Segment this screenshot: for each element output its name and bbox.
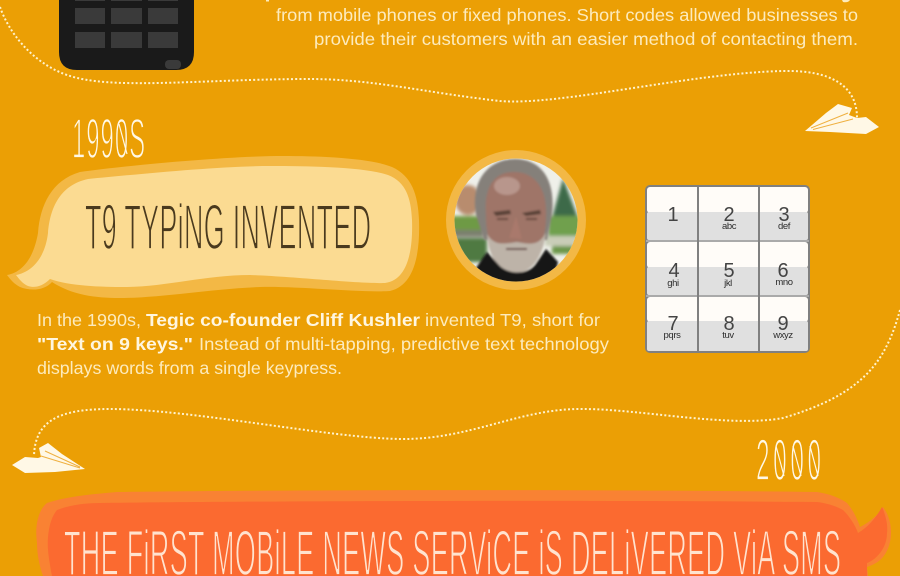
- keypad digits: pqrs: [664, 330, 681, 341]
- dotted flight path: lower: [34, 310, 900, 456]
- keypad digits: 5: [723, 260, 735, 282]
- speech bubble: first mobile news service: [36, 490, 891, 576]
- keypad digits: 8: [723, 313, 735, 335]
- paragraph: T9 description: [37, 310, 609, 378]
- keypad digits: 4: [668, 260, 680, 282]
- year label: 2000: 2000: [756, 429, 821, 493]
- phone illustration: [59, 0, 194, 70]
- intro paragraph about short codes: provide their customers with an easier method of contacting them.: [314, 29, 858, 49]
- keypad digits: jkl: [723, 278, 732, 289]
- keypad digits: 2: [723, 204, 735, 226]
- dotted flight path: upper: [0, 7, 857, 118]
- paragraph: T9 description: "Text on 9 keys.": [37, 334, 193, 354]
- keypad digits: 9: [777, 313, 789, 335]
- year label: 1990s: 1990S: [72, 107, 145, 171]
- keypad digits: def: [778, 221, 791, 232]
- phone keys: [75, 0, 181, 69]
- keypad digits: abc: [722, 221, 737, 232]
- bubble title: T9 TYPiNG INVENTED: [85, 193, 371, 263]
- paragraph: T9 description: invented T9, short for: [425, 310, 600, 330]
- keypad rows: [646, 186, 809, 352]
- intro paragraph about short codes: [266, 0, 858, 49]
- keypad digits: ghi: [667, 278, 679, 289]
- paragraph: T9 description: Instead of multi-tapping, predictive text technology: [199, 334, 609, 354]
- paragraph: T9 description: displays words from a single keypress.: [37, 358, 342, 378]
- intro paragraph about short codes: from mobile phones or fixed phones. Short codes allowed businesses to: [276, 5, 858, 25]
- keypad digits: 3: [778, 204, 790, 226]
- portrait: Cliff Kushler: [446, 150, 586, 290]
- icon: paper plane right: [805, 104, 879, 134]
- keypad digits: 1: [667, 204, 679, 226]
- keypad digits: [664, 204, 793, 341]
- keypad digits: wxyz: [772, 330, 793, 341]
- icon: paper plane left: [12, 443, 85, 473]
- paragraph: T9 description: In the 1990s,: [37, 310, 141, 330]
- keypad digits: 7: [667, 313, 679, 335]
- keypad illustration: [645, 185, 810, 353]
- keypad digits: tuv: [722, 330, 734, 341]
- keypad digits: mno: [775, 277, 793, 288]
- speech bubble: T9 typing invented: [7, 156, 419, 298]
- paragraph: T9 description: Tegic co-founder Cliff Kushler: [146, 310, 420, 330]
- keypad digits: 6: [777, 260, 789, 282]
